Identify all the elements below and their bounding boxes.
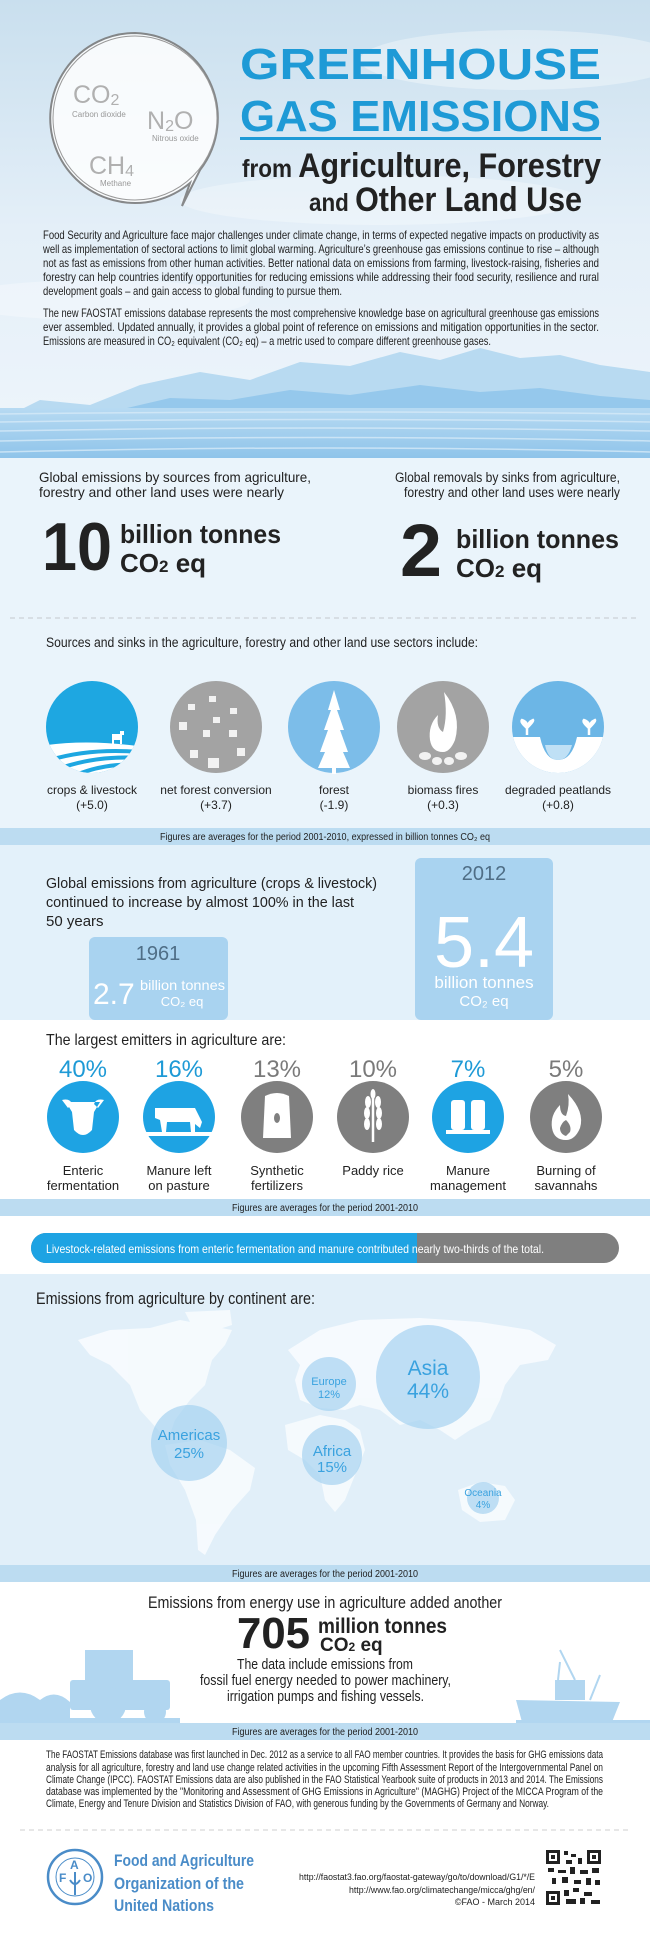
footnote bar 2: Figures are averages for the period 2001-2010 bbox=[232, 1203, 418, 1214]
section: largest emitters: The largest emitters in agriculture are: bbox=[46, 1032, 286, 1049]
labels: sources and sinks: (+5.0) bbox=[76, 798, 108, 812]
bubble: Americas: Americas bbox=[158, 1427, 220, 1444]
bar: 2012: 2012 bbox=[462, 863, 506, 885]
title: GAS EMISSIONS bbox=[240, 92, 601, 141]
icon: net forest conversion bbox=[170, 681, 262, 773]
labels: emitters bbox=[47, 1163, 598, 1193]
footnote bar 2 bbox=[0, 1199, 650, 1216]
bubble: Asia: Asia bbox=[408, 1357, 449, 1380]
bubble: Oceania bbox=[464, 1482, 502, 1514]
title: GREENHOUSE bbox=[240, 40, 601, 89]
labels: emitters: Synthetic bbox=[250, 1163, 304, 1178]
footnote bar 4 bbox=[0, 1723, 650, 1740]
speech bubble with gases: CH bbox=[89, 152, 125, 180]
footnote bar 1: Figures are averages for the period 2001-2010, expressed in billion tonnes CO₂ eq bbox=[160, 832, 490, 843]
bubble: Africa: Africa bbox=[313, 1443, 352, 1460]
icon: degraded peatlands bbox=[512, 681, 604, 773]
footnote bar 1 bbox=[0, 828, 650, 845]
stat: global removals 2 billion tonnes: 2 bbox=[400, 509, 442, 592]
section: energy use: 705 bbox=[237, 1609, 310, 1658]
icon: fertilizer bag bbox=[241, 1081, 313, 1153]
speech bubble with gases: Carbon dioxide bbox=[72, 110, 126, 119]
percentages bbox=[59, 1056, 583, 1083]
bar: 1961: CO₂ eq bbox=[161, 994, 203, 1009]
bubble: Africa: 15% bbox=[317, 1459, 347, 1476]
icon: burning flame bbox=[530, 1081, 602, 1153]
icon: crops & livestock bbox=[46, 681, 138, 773]
heading: sources and sinks: Sources and sinks in the agriculture, forestry and other land use sectors include: bbox=[46, 635, 478, 650]
section: energy use: irrigation pumps and fishing vessels. bbox=[227, 1688, 424, 1705]
speech bubble with gases: 2 bbox=[110, 92, 120, 109]
labels: emitters: Manure left bbox=[146, 1163, 212, 1178]
bar: 1961: billion tonnes bbox=[140, 977, 225, 993]
section: growth 1961 vs 2012 bbox=[0, 845, 650, 1020]
section: energy use: CO2 eq bbox=[320, 1635, 383, 1656]
bubble: Oceania: Oceania bbox=[464, 1488, 502, 1499]
percentages: 5% bbox=[549, 1056, 583, 1083]
bubble: Europe: Europe bbox=[311, 1376, 347, 1388]
section: largest emitters bbox=[0, 1020, 650, 1200]
illustration: tractor bbox=[0, 1650, 180, 1723]
stat: global removals 2 billion tonnes: Global removals by sinks from agriculture, bbox=[395, 470, 620, 485]
speech bubble with gases: Nitrous oxide bbox=[152, 134, 199, 143]
FAO logo bbox=[48, 1850, 102, 1904]
stat: global emissions 10 billion tonnes bbox=[39, 469, 311, 585]
intro text bbox=[42, 228, 599, 348]
labels: sources and sinks: (-1.9) bbox=[320, 798, 348, 812]
percentages: 10% bbox=[349, 1056, 397, 1083]
bubble: Oceania: 4% bbox=[476, 1500, 490, 1511]
section: emissions by continent map: Emissions from agriculture by continent are: bbox=[36, 1289, 315, 1308]
labels: sources and sinks: (+0.3) bbox=[427, 798, 459, 812]
labels: emitters: Manure bbox=[446, 1163, 490, 1178]
section: growth 1961 vs 2012: 50 years bbox=[46, 913, 104, 930]
labels: sources and sinks bbox=[47, 783, 611, 812]
stat: global removals 2 billion tonnes: forestry and other land uses were nearly bbox=[404, 485, 620, 500]
callout: livestock two-thirds bar bbox=[31, 1233, 619, 1263]
FAO logo: A bbox=[70, 1858, 79, 1872]
footer text bbox=[46, 1749, 604, 1810]
stat: global removals 2 billion tonnes bbox=[395, 470, 620, 592]
bar: 2012: CO₂ eq bbox=[459, 993, 509, 1010]
labels: sources and sinks: degraded peatlands bbox=[505, 783, 611, 797]
percentages: 40% bbox=[59, 1056, 107, 1083]
bar: 2012: billion tonnes bbox=[434, 973, 534, 992]
title: from Agriculture, Forestry bbox=[242, 147, 601, 185]
bubble: Africa bbox=[302, 1425, 362, 1485]
speech bubble with gases: 4 bbox=[125, 163, 134, 180]
bubble: Europe: 12% bbox=[318, 1389, 340, 1401]
labels: emitters: Burning of bbox=[536, 1163, 596, 1178]
bubble: Americas: 25% bbox=[174, 1445, 204, 1462]
FAO name: Organization of the bbox=[114, 1874, 244, 1893]
QR code bbox=[546, 1850, 601, 1905]
bar: 2012 bbox=[415, 858, 553, 1020]
title: and Other Land Use bbox=[309, 181, 582, 219]
speech bubble with gases: CO bbox=[73, 81, 110, 109]
bar: 1961 bbox=[89, 937, 228, 1020]
icon: cow head bbox=[47, 1081, 119, 1153]
bar: 1961: 2.7 bbox=[93, 978, 135, 1011]
speech bubble with gases bbox=[50, 33, 218, 206]
icon: forest bbox=[288, 681, 380, 774]
speech bubble with gases: N bbox=[147, 107, 165, 135]
footnote bar 4: Figures are averages for the period 2001-2010 bbox=[232, 1727, 418, 1738]
links and credit: http://faostat3.fao.org/faostat-gateway/go/to/download/G1/*/E bbox=[299, 1872, 535, 1882]
FAO name bbox=[114, 1851, 254, 1915]
stat: global removals 2 billion tonnes: CO2 eq bbox=[456, 553, 542, 583]
links and credit: ©FAO - March 2014 bbox=[455, 1897, 535, 1907]
icon: paddy rice bbox=[337, 1081, 409, 1153]
stat: global emissions 10 billion tonnes: forestry and other land uses were nearly bbox=[39, 484, 284, 500]
callout: livestock two-thirds bar: Livestock-related emissions from enteric fermentation and manure contributed nearly two-thirds of the total. bbox=[46, 1242, 544, 1256]
labels: emitters: Paddy rice bbox=[342, 1163, 404, 1178]
header background: sky and landscape bbox=[0, 0, 650, 458]
bubble: Europe bbox=[302, 1357, 356, 1411]
icon: manure silos bbox=[432, 1081, 504, 1153]
bar: 1961: 1961 bbox=[136, 943, 180, 965]
percentages: 7% bbox=[451, 1056, 485, 1083]
section: growth 1961 vs 2012: continued to increase by almost 100% in the last bbox=[46, 894, 355, 911]
links and credit: http://www.fao.org/climatechange/micca/ghg/en/ bbox=[349, 1885, 535, 1895]
FAO logo: O bbox=[83, 1871, 92, 1885]
labels: emitters: on pasture bbox=[148, 1178, 210, 1193]
percentages: 13% bbox=[253, 1056, 301, 1083]
title bbox=[240, 40, 601, 219]
stat: global emissions 10 billion tonnes: CO2 eq bbox=[120, 548, 206, 578]
labels: emitters: management bbox=[430, 1178, 506, 1193]
stat: global emissions 10 billion tonnes: billion tonnes bbox=[120, 519, 281, 549]
section: energy use bbox=[0, 1582, 650, 1723]
labels: sources and sinks: net forest conversion bbox=[160, 783, 272, 797]
section: energy use: million tonnes bbox=[318, 1615, 447, 1638]
labels: sources and sinks: forest bbox=[319, 783, 350, 797]
icon: cow grazing bbox=[143, 1081, 215, 1153]
links and credit bbox=[299, 1872, 535, 1907]
section: energy use: Emissions from energy use in agriculture added another bbox=[148, 1593, 502, 1612]
intro text: development goals – and gain access to global funding to pursue them. bbox=[43, 284, 342, 298]
percentages: 16% bbox=[155, 1056, 203, 1083]
section background: sources and sinks bbox=[0, 458, 650, 848]
bar: 2012: 5.4 bbox=[434, 903, 534, 983]
section: emissions by continent map bbox=[0, 1274, 650, 1565]
labels: emitters: Enteric bbox=[63, 1163, 104, 1178]
labels: sources and sinks: (+3.7) bbox=[200, 798, 232, 812]
speech bubble with gases: Methane bbox=[100, 179, 132, 188]
labels: emitters: fertilizers bbox=[251, 1178, 303, 1193]
labels: emitters: savannahs bbox=[535, 1178, 598, 1193]
bubble: Asia: 44% bbox=[407, 1380, 449, 1403]
FAO name: United Nations bbox=[114, 1896, 214, 1915]
FAO name: Food and Agriculture bbox=[114, 1851, 254, 1870]
stat: global emissions 10 billion tonnes: 10 bbox=[42, 509, 112, 585]
labels: sources and sinks: (+0.8) bbox=[542, 798, 574, 812]
footnote bar 3 bbox=[0, 1565, 650, 1582]
labels: sources and sinks: biomass fires bbox=[408, 783, 478, 797]
section: growth 1961 vs 2012: Global emissions from agriculture (crops & livestock) bbox=[46, 875, 377, 892]
icon: biomass fires bbox=[397, 681, 489, 773]
bubble: Asia bbox=[376, 1325, 480, 1429]
footnote bar 3: Figures are averages for the period 2001-2010 bbox=[232, 1569, 418, 1580]
speech bubble with gases: 2 bbox=[165, 118, 174, 135]
section: energy use: fossil fuel energy needed to power machinery, bbox=[200, 1672, 451, 1689]
labels: emitters: fermentation bbox=[47, 1178, 119, 1193]
speech bubble with gases: O bbox=[174, 107, 193, 135]
bubble: Americas bbox=[151, 1405, 227, 1481]
illustration: fishing boat bbox=[516, 1650, 650, 1723]
world map bbox=[78, 1310, 556, 1555]
section: energy use: The data include emissions from bbox=[237, 1656, 413, 1673]
stat: global removals 2 billion tonnes: billion tonnes bbox=[456, 524, 619, 554]
stat: global emissions 10 billion tonnes: Global emissions by sources from agriculture, bbox=[39, 469, 311, 485]
labels: sources and sinks: crops & livestock bbox=[47, 783, 138, 797]
intro text: Emissions are measured in CO₂ equivalent (CO₂ eq) – a metric used to compare different greenhouse gases. bbox=[43, 334, 491, 348]
FAO logo: F bbox=[59, 1871, 66, 1885]
